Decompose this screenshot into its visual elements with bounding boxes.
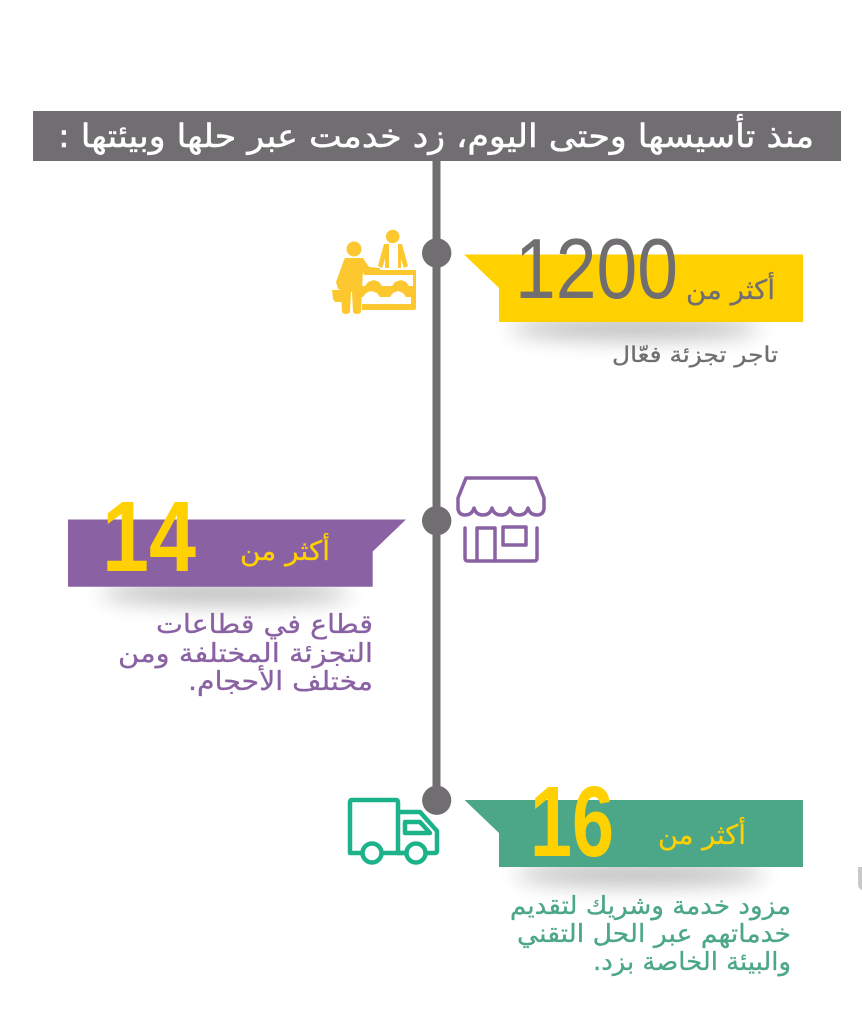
caption: والبيئة الخاصة بزد. xyxy=(593,947,791,977)
icon: storefront xyxy=(458,478,544,561)
icon: shoppers at retail counter xyxy=(332,230,416,314)
caption: خدماتهم عبر الحل التقني xyxy=(517,919,791,949)
timeline marker 3 xyxy=(422,786,451,815)
edge fragment xyxy=(858,867,862,890)
more than label: أكثر من xyxy=(658,816,746,851)
caption: مختلف الأحجام. xyxy=(188,664,373,697)
yellow banner xyxy=(464,254,803,322)
shadow under yellow banner xyxy=(510,317,760,339)
shadow under green banner xyxy=(515,863,765,885)
caption: مزود خدمة وشريك لتقديم xyxy=(510,891,791,921)
timeline spine xyxy=(432,161,440,801)
panel: sectors xyxy=(68,481,406,697)
caption xyxy=(118,610,373,697)
timeline marker 2 xyxy=(422,506,451,535)
panel: retailers xyxy=(464,222,803,368)
caption: قطاع في قطاعات xyxy=(156,610,373,640)
more than label: أكثر من xyxy=(240,532,330,567)
caption: التجزئة المختلفة ومن xyxy=(118,639,373,669)
purple banner xyxy=(68,520,406,587)
number 1200: 1200 xyxy=(515,222,678,317)
caption xyxy=(510,891,791,977)
timeline marker 1 xyxy=(422,238,451,268)
caption: تاجر تجزئة فعّال xyxy=(612,343,778,368)
icon: delivery truck xyxy=(350,800,437,862)
shadow under purple banner xyxy=(100,582,350,604)
title bar: منذ تأسيسها وحتى اليوم، زد خدمت عبر حلها وبيئتها : xyxy=(58,114,814,155)
green banner xyxy=(464,800,803,867)
more than label: أكثر من xyxy=(686,271,775,306)
panel: service providers xyxy=(464,766,803,977)
number 14: 14 xyxy=(102,481,196,593)
title bar xyxy=(33,111,841,161)
number 16: 16 xyxy=(530,766,614,878)
